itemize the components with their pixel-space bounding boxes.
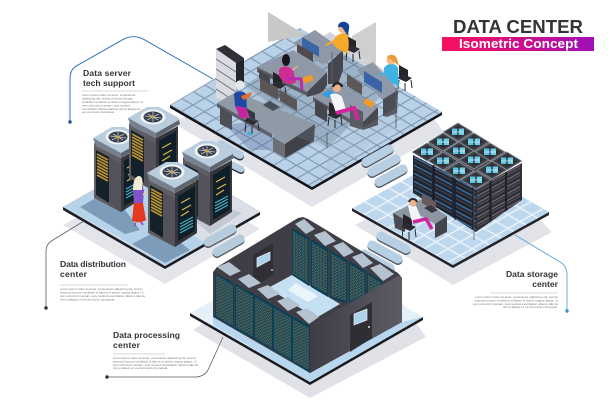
label: data storage center: Data storage xyxy=(506,269,558,279)
label: data distribution center: center xyxy=(60,269,88,279)
label: data storage center xyxy=(473,269,559,309)
label: data processing center xyxy=(113,330,199,370)
label: data distribution center: nisi ut aliquip ex ea commodo consequat. xyxy=(60,298,115,302)
server tower back right xyxy=(128,107,180,192)
label: data server tech support: exercitation ullamco laboris nisi ut aliquip ex xyxy=(82,107,141,111)
label: data distribution center: enim ad minim veniam, quis nostrud exercitation ullamco laboris xyxy=(60,294,146,298)
steps between office and storage xyxy=(366,149,403,184)
label: data server tech support: incididunt ut labore et dolore magna aliqua. Ut xyxy=(82,100,143,104)
label: data storage center: eiusmod tempor incididunt ut labore et dolore magna aliqua. Ut xyxy=(474,298,558,302)
label: data server tech support xyxy=(82,68,148,114)
front right outer wall xyxy=(310,276,402,373)
server tower right xyxy=(182,141,234,226)
person: orange shirt with blue hair xyxy=(326,22,360,62)
label: data processing center: eiusmod tempor incididunt ut labore et dolore magna aliqua. Ut xyxy=(113,360,197,364)
label: data distribution center xyxy=(60,259,146,302)
platform: data distribution center xyxy=(63,152,260,284)
room base walls xyxy=(213,217,402,373)
office: filing cabinet xyxy=(216,45,244,106)
subtitle banner: Isometric Concept xyxy=(459,37,579,51)
data storage center: server rack block xyxy=(412,122,522,232)
door with window on front wall xyxy=(350,302,372,352)
data processing center: room xyxy=(213,217,402,373)
server tower back left xyxy=(93,127,145,212)
blue monitor xyxy=(302,37,319,57)
rack top tiles xyxy=(412,122,522,190)
keyboard xyxy=(424,205,438,213)
monitor with red screen xyxy=(297,44,313,62)
steps between office and distribution xyxy=(221,144,241,170)
label: data server tech support: tech support xyxy=(83,78,135,88)
steps between storage and processing xyxy=(364,236,406,270)
door with window on back wall xyxy=(253,243,273,287)
office: desk far right with blue monitor xyxy=(357,62,398,117)
office: long L-shaped desk xyxy=(217,78,315,158)
office: partition panels xyxy=(268,12,376,64)
data distribution center: server towers xyxy=(93,107,234,247)
title xyxy=(442,16,594,51)
shaded glass zone on floor xyxy=(245,32,398,148)
steps between distribution and processing xyxy=(208,229,240,254)
back rack row xyxy=(292,219,394,303)
label: data server tech support: adipiscing elit, sed do eiusmod tempor xyxy=(82,96,133,100)
leader line: data processing center xyxy=(105,337,223,379)
platform: data server tech support floor xyxy=(170,28,444,207)
label: data storage center: enim ad minim veniam, quis nostrud exercitation ullamco laboris xyxy=(473,302,558,306)
label: data storage center: center xyxy=(532,279,559,289)
person: magenta top with black hair xyxy=(271,54,302,98)
label: data distribution center: eiusmod tempor incididunt ut labore et dolore magna aliqua. Ut xyxy=(60,290,144,294)
platform: data storage center floor xyxy=(352,155,552,285)
person: white haired woman with book xyxy=(234,80,259,135)
server tower front xyxy=(147,162,199,247)
person: woman in red dress xyxy=(132,176,147,226)
label: data processing center: enim ad minim veniam, quis nostrud exercitation ullamco laboris xyxy=(113,363,199,367)
person: white shirt with headphones xyxy=(327,83,358,128)
office: glass partitions xyxy=(246,52,396,172)
data storage center: operator desk xyxy=(393,190,474,240)
label: data server tech support: ea commodo consequat. xyxy=(82,110,115,114)
label: data processing center: Data processing xyxy=(113,330,180,340)
label: data processing center: Lorem ipsum dolor sit amet, consectetur adipiscing elit, sed do xyxy=(113,356,196,360)
label: data server tech support: Data server xyxy=(83,68,132,78)
label: data storage center: Lorem ipsum dolor sit amet, consectetur adipiscing elit, sed do xyxy=(475,295,558,299)
title: DATA CENTER xyxy=(453,16,583,37)
platform: data processing center floor xyxy=(190,250,426,398)
front rack row xyxy=(215,262,319,373)
office: desk right xyxy=(313,74,378,130)
monitor xyxy=(422,194,436,212)
label: data storage center: nisi ut aliquip ex ea commodo consequat. xyxy=(503,305,558,309)
monitor with red screen xyxy=(347,74,362,95)
leader line: data distribution center xyxy=(44,221,84,310)
label: data distribution center: Lorem ipsum dolor sit amet, consectetur adipiscing elit, sed do xyxy=(60,287,143,291)
keyboard xyxy=(263,101,280,111)
leader line: data server tech support xyxy=(68,37,213,124)
label: data server tech support: enim ad minim veniam, quis nostrud xyxy=(82,104,130,108)
label: data server tech support: Lorem ipsum dolor sit amet, consectetur xyxy=(82,93,135,97)
label: data processing center: center xyxy=(113,340,141,350)
monitor pair with red screens xyxy=(260,78,278,100)
label: data distribution center: Data distribution xyxy=(60,259,126,269)
label: data processing center: nisi ut aliquip ex ea commodo consequat. xyxy=(113,366,168,370)
office: desk middle xyxy=(257,50,327,97)
person: cyan shirt with orange hair xyxy=(378,55,412,91)
office: desk far back xyxy=(293,30,343,84)
leader line: data storage center xyxy=(515,235,569,313)
room floor xyxy=(268,275,340,318)
